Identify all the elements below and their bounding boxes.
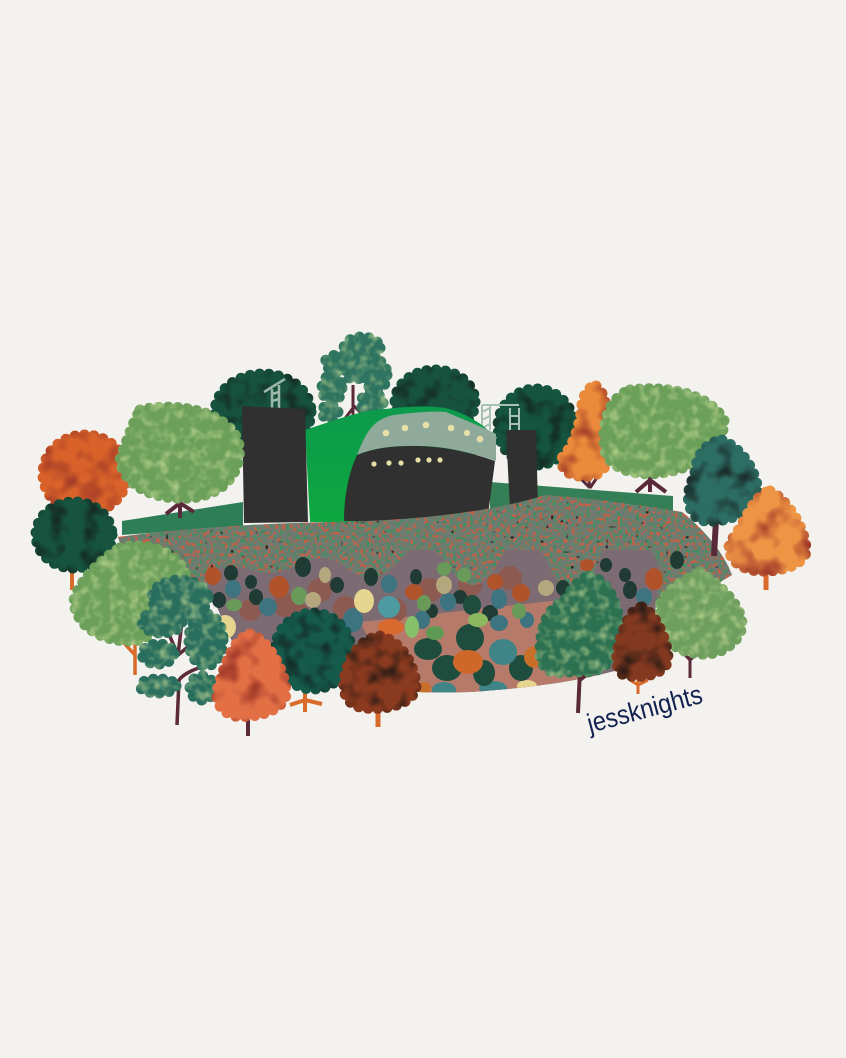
stage truss right xyxy=(482,405,519,430)
tree: rust far left xyxy=(43,435,127,513)
signature: jessknights: jessknights xyxy=(583,679,706,739)
tree: dark green far left xyxy=(36,502,112,590)
crowd: painted foreground audience xyxy=(190,550,684,700)
tree: orange far right xyxy=(729,491,806,590)
tree: light green front left xyxy=(74,546,186,675)
tree: light green front right xyxy=(660,572,742,678)
crowd: speckled distant audience xyxy=(118,495,732,600)
stage lower lights xyxy=(371,457,443,467)
stage: black dome xyxy=(344,446,495,521)
stage truss left xyxy=(264,379,285,408)
tree: tall teal centre xyxy=(322,337,387,425)
tree: light green back right xyxy=(604,389,724,492)
tree: brown front xyxy=(344,636,416,727)
right speaker tower xyxy=(506,430,538,510)
tree: light green left xyxy=(120,407,239,518)
left speaker tower xyxy=(242,406,308,523)
tree: teal right of stage xyxy=(688,440,758,556)
tree: dark green back left xyxy=(215,374,311,450)
stage: grey roof xyxy=(357,412,496,461)
stage: green shell xyxy=(305,406,490,522)
tree: brown right xyxy=(617,607,668,694)
ground: green strip left xyxy=(122,502,243,535)
tree: dark green behind right tower xyxy=(498,389,574,465)
tree: dark green back centre xyxy=(395,370,475,434)
tree: green bushy right xyxy=(540,576,620,713)
tree: orange-red front xyxy=(217,634,286,736)
tree: dark teal front xyxy=(275,613,351,712)
illustration: festival stage surrounded by trees xyxy=(30,332,811,738)
tree: teal branching pine xyxy=(140,580,223,725)
stage roof lights xyxy=(383,422,483,442)
tree: orange back right xyxy=(562,386,608,488)
ground: green strip right xyxy=(490,482,673,525)
